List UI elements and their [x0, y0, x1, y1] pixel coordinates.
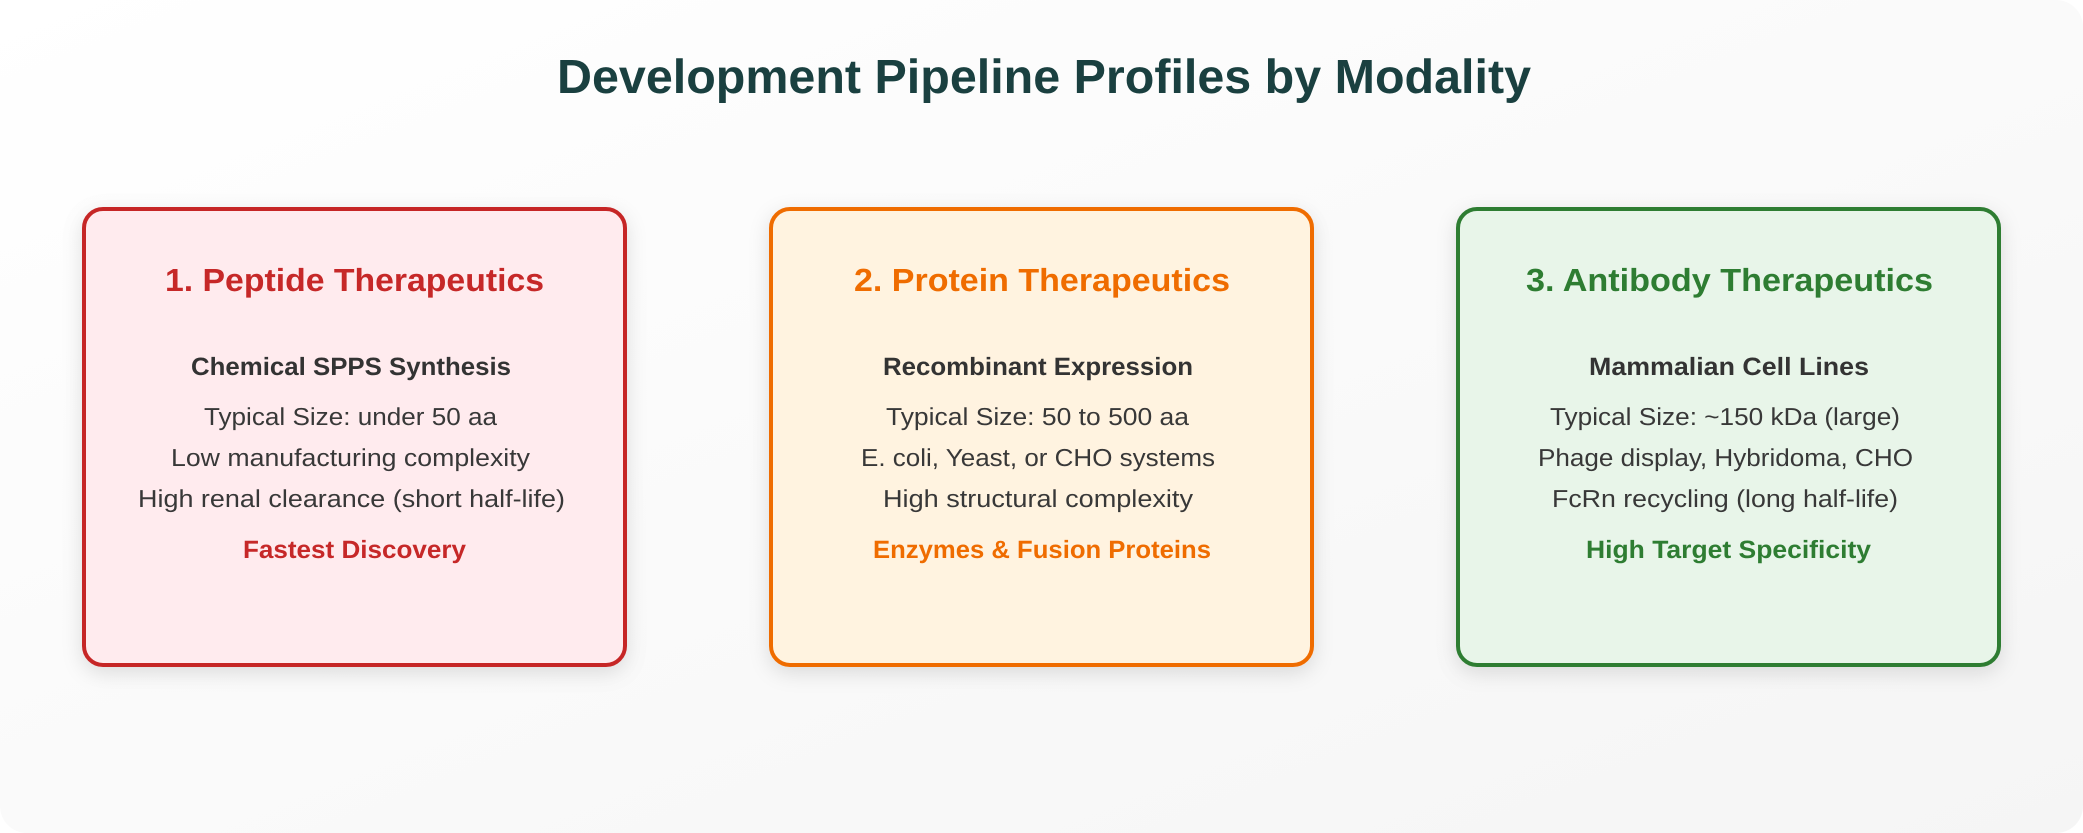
card background: protein	[771, 209, 1312, 665]
highlight: antibody: High Target Specificity	[1586, 536, 1871, 564]
complexity: peptide: Low manufacturing complexity	[171, 445, 531, 472]
size: peptide: Typical Size: under 50 aa	[204, 404, 497, 431]
title: Development Pipeline Profiles by Modality	[557, 51, 1531, 104]
heading: antibody: 3. Antibody Therapeutics	[1526, 262, 1933, 298]
complexity: protein: High structural complexity	[883, 486, 1194, 513]
highlight: protein: Enzymes & Fusion Proteins	[873, 536, 1211, 564]
size: antibody: Typical Size: ~150 kDa (large)	[1550, 404, 1900, 431]
subheading: peptide: Chemical SPPS Synthesis	[191, 353, 511, 381]
size: protein: Typical Size: 50 to 500 aa	[886, 404, 1189, 431]
highlight: peptide: Fastest Discovery	[243, 536, 466, 564]
half-life: antibody: FcRn recycling (long half-life)	[1552, 486, 1898, 513]
card background: antibody	[1458, 209, 1999, 665]
methods: antibody: Phage display, Hybridoma, CHO	[1538, 445, 1913, 472]
clearance: peptide: High renal clearance (short half-life)	[138, 486, 565, 513]
panel: protein therapeutics	[771, 209, 1312, 665]
subheading: protein: Recombinant Expression	[883, 353, 1193, 381]
systems: protein: E. coli, Yeast, or CHO systems	[861, 445, 1215, 472]
panel: peptide therapeutics	[84, 209, 625, 665]
heading: peptide: 1. Peptide Therapeutics	[165, 262, 544, 298]
subheading: antibody: Mammalian Cell Lines	[1589, 353, 1869, 381]
heading: protein: 2. Protein Therapeutics	[854, 262, 1230, 298]
panel: antibody therapeutics	[1458, 209, 1999, 665]
card background: peptide	[84, 209, 625, 665]
